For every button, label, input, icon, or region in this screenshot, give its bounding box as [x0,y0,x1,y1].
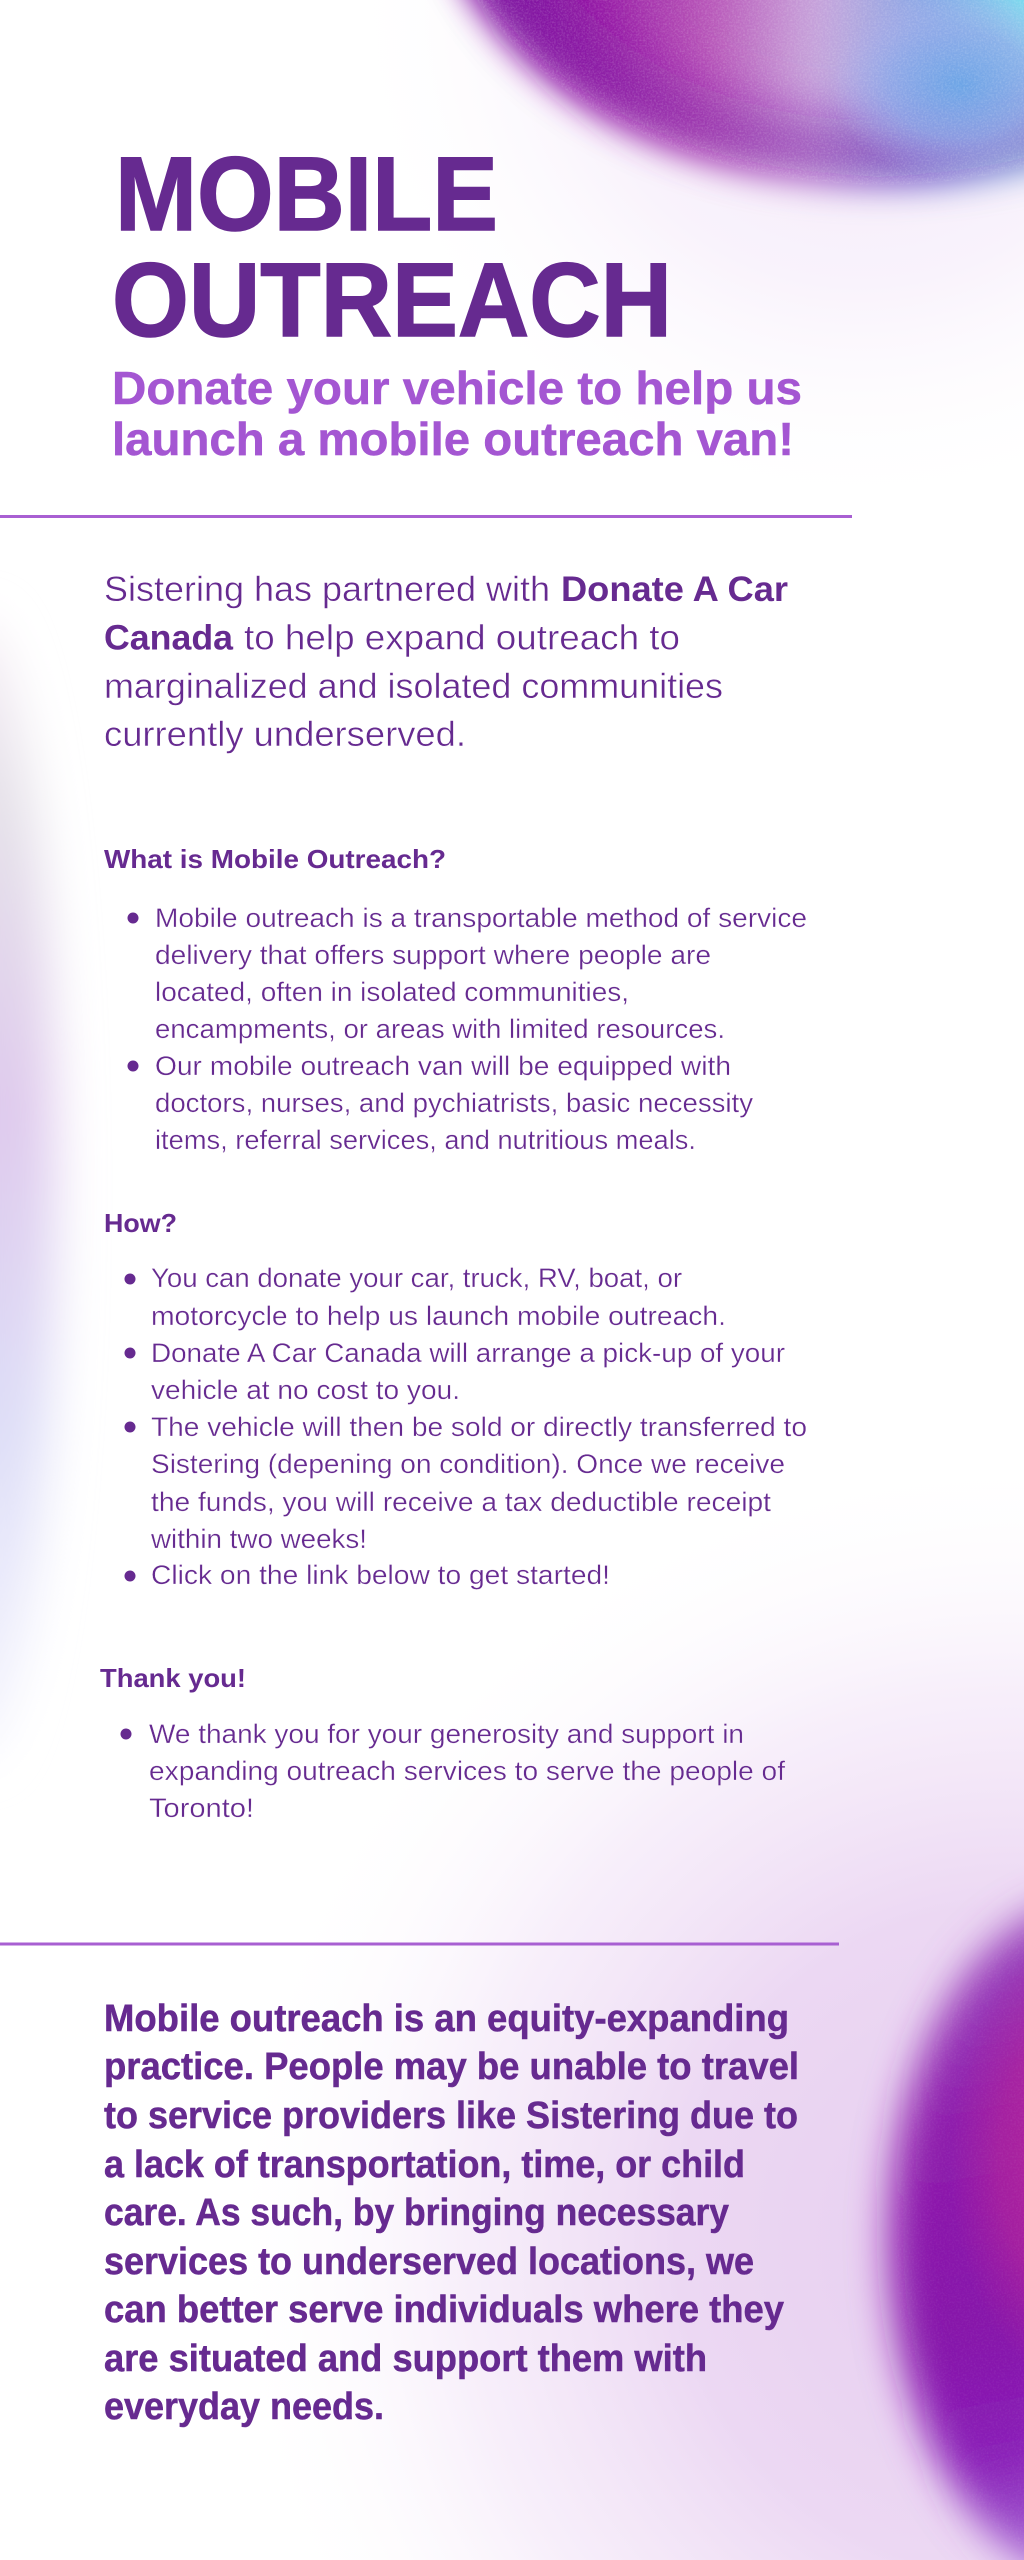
list: how: vehicle at no cost to you. [151,1375,460,1405]
gradient blob: bottom right [860,1890,1024,2560]
closing statement: practice. People may be unable to travel [104,2046,799,2088]
list: how: Donate A Car Canada will arrange a pick-up of your [151,1338,785,1368]
list: what is mobile outreach: encampments, or areas with limited resources. [155,1014,725,1044]
intro paragraph: Canada [104,618,234,658]
list: what is mobile outreach: items, referral services, and nutritious meals. [155,1125,696,1155]
closing statement: to service providers like Sistering due to [104,2095,798,2137]
closing statement: can better serve individuals where they [104,2289,784,2331]
intro paragraph: marginalized and isolated communities [104,667,723,706]
list: how: Sistering (depening on condition). Once we receive [151,1449,785,1479]
list: thank you: We thank you for your generosity and support in [149,1719,744,1749]
heading: Thank you!: Thank you! [100,1663,246,1693]
subtitle [112,362,802,465]
list: how: motorcycle to help us launch mobile outreach. [151,1301,726,1331]
closing statement: everyday needs. [104,2386,384,2428]
gradient blob: left edge [0,620,55,1760]
divider [0,515,852,518]
list: what is mobile outreach: Our mobile outreach van will be equipped with [155,1051,731,1081]
list: how: Click on the link below to get started! [151,1560,610,1590]
soft halo: bottom right [200,1440,1024,2560]
soft halo: top right [300,0,1024,540]
closing statement: Mobile outreach is an equity-expanding [104,1998,789,2040]
subtitle: Donate your vehicle to help us [112,362,802,414]
divider [0,1942,839,1946]
list: what is mobile outreach: doctors, nurses, and pychiatrists, basic necessity [155,1088,754,1118]
list: what is mobile outreach: Mobile outreach is a transportable method of service [155,903,807,933]
gradient blob: top right [400,0,1024,210]
closing statement: services to underserved locations, we [104,2241,754,2283]
list: how: The vehicle will then be sold or directly transferred to [151,1412,807,1442]
list: how: the funds, you will receive a tax deductible receipt [151,1487,772,1517]
title: MOBILE [115,136,498,253]
list: thank you: expanding outreach services to serve the people of [149,1756,786,1786]
heading: How?: How? [104,1208,177,1238]
intro paragraph: Donate A Car [561,570,788,609]
list: thank you [120,1719,786,1823]
closing statement: are situated and support them with [104,2338,707,2380]
list: how: You can donate your car, truck, RV, boat, or [151,1263,682,1293]
subtitle: launch a mobile outreach van! [112,413,794,465]
list: what is mobile outreach [128,903,807,1155]
intro paragraph: currently underserved. [104,715,466,754]
closing statement: care. As such, by bringing necessary [104,2192,729,2234]
intro paragraph: to help expand outreach to [244,618,680,658]
intro paragraph [104,570,788,754]
title [112,136,672,359]
closing statement: a lack of transportation, time, or child [104,2144,745,2186]
closing statement [104,1998,799,2428]
heading: What is Mobile Outreach?: What is Mobile Outreach? [104,844,446,874]
title: OUTREACH [112,242,672,359]
list: how: within two weeks! [150,1524,367,1554]
list: thank you: Toronto! [149,1793,254,1823]
list: what is mobile outreach: delivery that offers support where people are [155,940,711,970]
list: how [124,1263,807,1590]
intro paragraph: Sistering has partnered with [104,570,550,609]
list: what is mobile outreach: located, often in isolated communities, [155,977,629,1007]
